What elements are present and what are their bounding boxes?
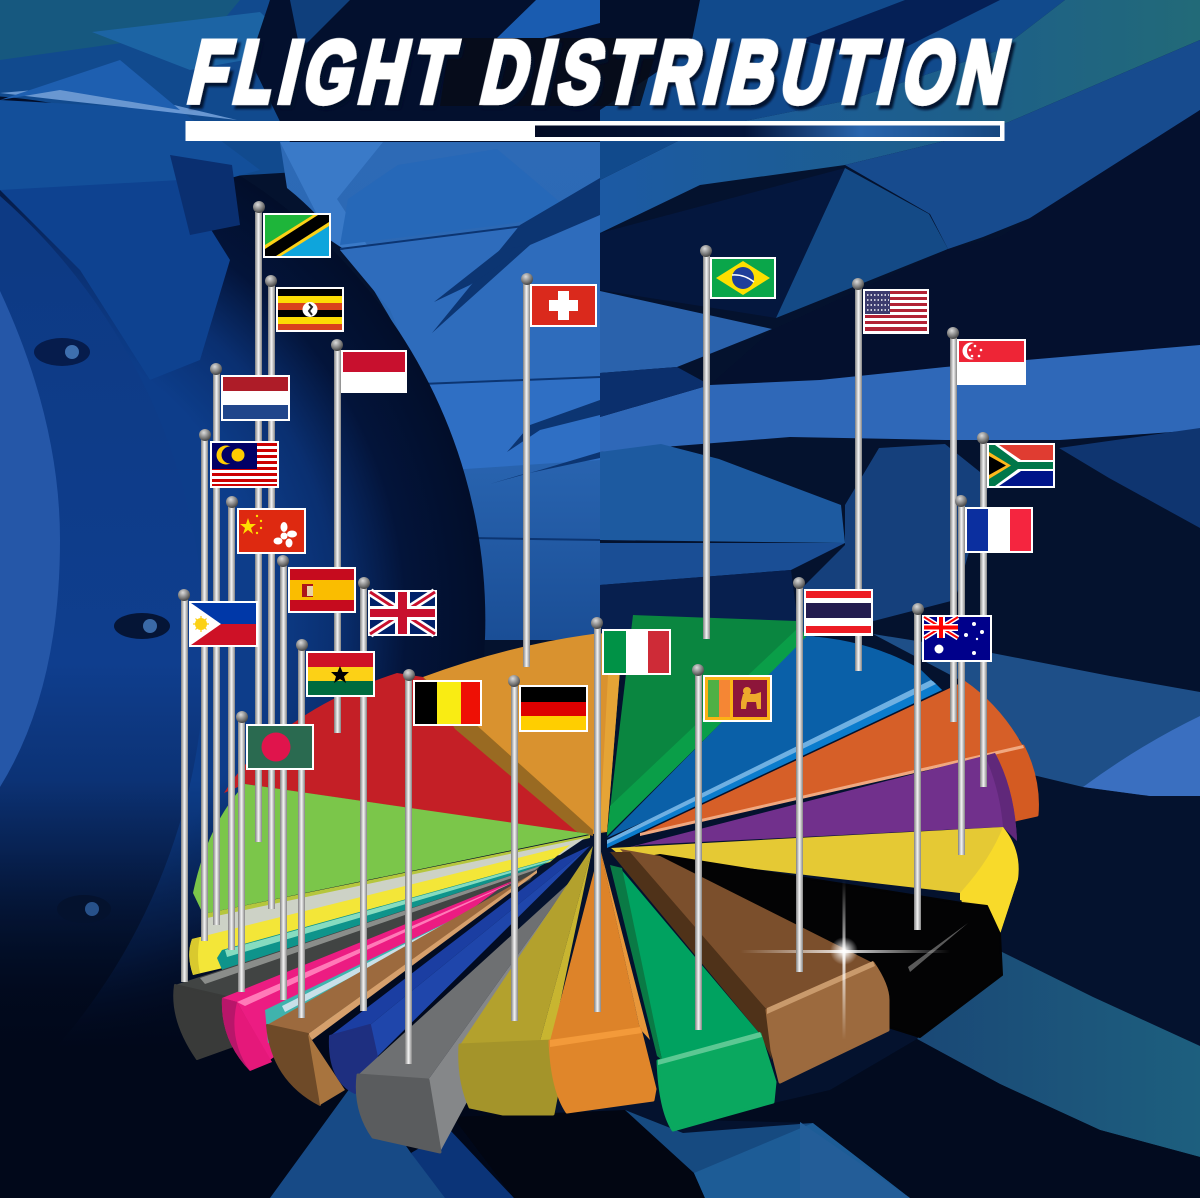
flag: Switzerland xyxy=(521,273,597,667)
flag: Italy xyxy=(591,617,671,1012)
flag: Tanzania xyxy=(253,201,331,842)
slice: black xyxy=(643,855,1002,1037)
slice: green xyxy=(607,615,807,836)
flag: USA xyxy=(852,278,929,671)
flag: Uganda xyxy=(265,275,344,909)
flag: Belgium xyxy=(403,669,482,1064)
title progress bar xyxy=(186,121,1004,141)
slice: lemon xyxy=(189,845,570,975)
slice: royal blue xyxy=(330,846,590,1093)
flag: Sri Lanka xyxy=(692,664,772,1030)
slice: pale grey xyxy=(207,838,585,936)
slice: emerald xyxy=(610,865,775,1130)
slice: blue xyxy=(607,636,942,848)
flag: South Africa xyxy=(977,432,1055,787)
flag: Malaysia xyxy=(199,429,279,941)
flag: Hong Kong xyxy=(226,496,306,950)
flag: Thailand xyxy=(793,577,873,972)
flag: Netherlands xyxy=(210,363,290,925)
flag: Singapore xyxy=(947,327,1026,722)
flag: Australia xyxy=(912,603,992,930)
slice: lime xyxy=(193,784,590,924)
slice: tan xyxy=(267,870,537,1105)
flag: Ghana xyxy=(296,639,375,1018)
slice: olive xyxy=(460,846,593,1114)
slice: turquoise xyxy=(265,892,510,1043)
slice: grey xyxy=(357,882,570,1152)
flag: United Kingdom xyxy=(358,577,437,1011)
flag: Spain xyxy=(277,555,356,1000)
slice: yellow xyxy=(611,827,1019,934)
flag: Brazil xyxy=(700,245,776,639)
3D pie chart xyxy=(174,615,1037,1152)
slice: amber xyxy=(423,632,623,836)
slice: amber front xyxy=(550,848,655,1112)
slice: teal xyxy=(217,858,555,972)
flag: Indonesia xyxy=(331,339,407,733)
flag: France xyxy=(955,495,1033,855)
flag: Philippines xyxy=(178,589,258,982)
slice: purple xyxy=(607,753,1017,853)
flag: Germany xyxy=(508,675,588,1021)
sparkle highlight xyxy=(740,880,950,1040)
slice: charcoal xyxy=(174,866,540,1059)
slice: red xyxy=(224,673,593,832)
slice: pink xyxy=(222,878,520,1071)
flag: Bangladesh xyxy=(236,711,314,992)
slice: orange xyxy=(640,681,1037,836)
slice: brown xyxy=(610,849,888,1082)
